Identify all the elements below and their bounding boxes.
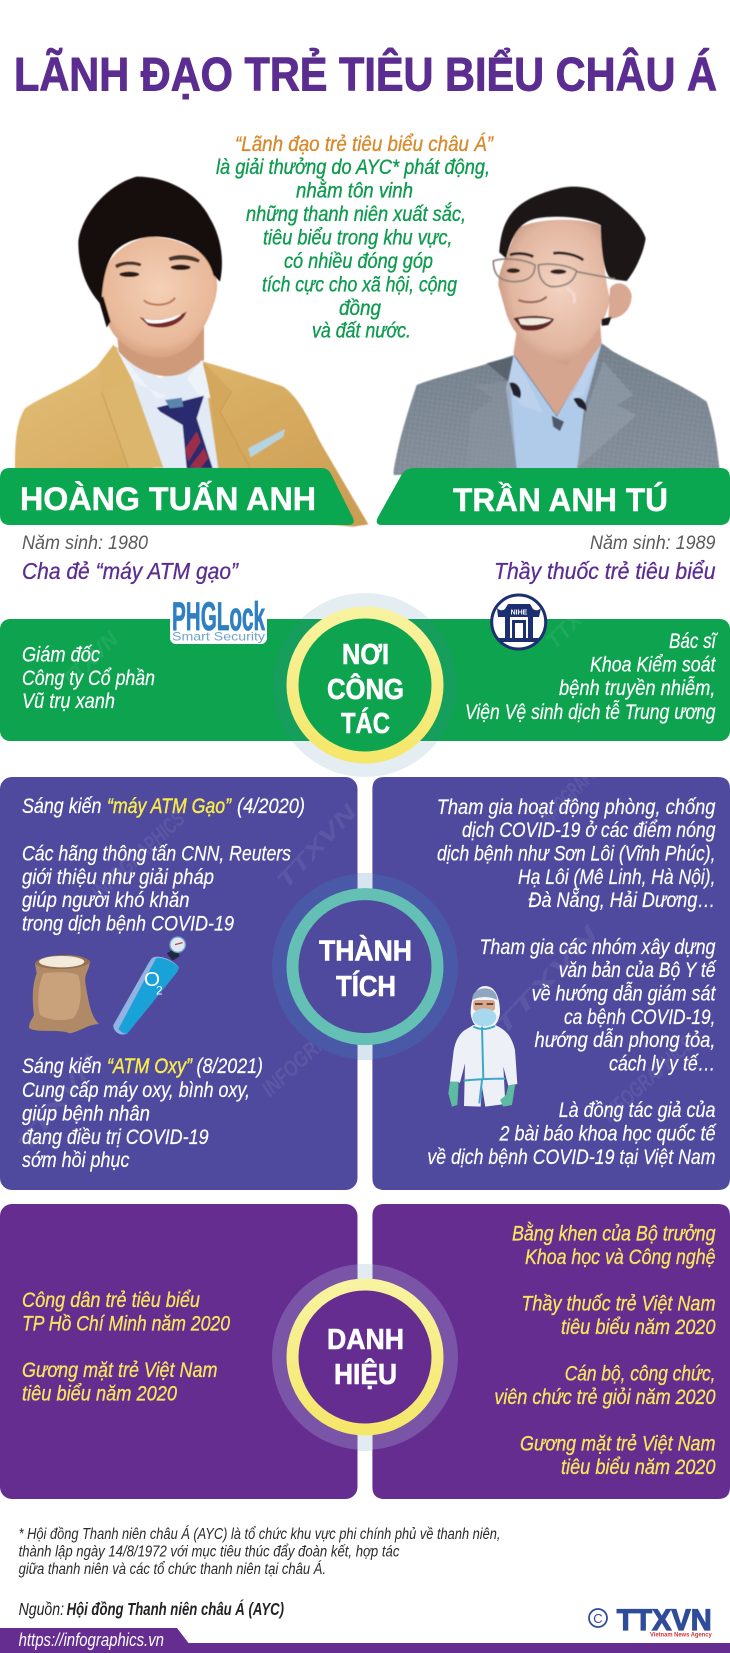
initiative: rice ATM — [22, 795, 305, 936]
left titles text: Công dân trẻ tiêu biểu — [22, 1289, 200, 1312]
initiative: oxygen ATM: đang điều trị COVID-19 — [22, 1126, 209, 1149]
panel: nơi công tác — [0, 586, 730, 741]
source — [19, 1598, 284, 1619]
logo: NIHE: NIHE — [511, 610, 528, 616]
initiative: rice ATM: giúp người khó khăn — [22, 889, 190, 912]
birth year and nickname: left — [22, 532, 239, 584]
badge: danh hiệu — [272, 1264, 458, 1451]
footnote: * Hội đồng Thanh niên châu Á (AYC) là tổ chức khu vực phi chính phủ về thanh niên, — [19, 1526, 500, 1543]
logo: TTXVN: Vietnam News Agency — [650, 1632, 712, 1638]
initiative: oxygen ATM: Sáng kiến — [22, 1055, 102, 1078]
logo: PHGLock — [170, 595, 267, 644]
left titles text: Gương mặt trẻ Việt Nam — [22, 1359, 217, 1382]
intro text: và đất nước. — [312, 320, 411, 342]
logo: TTXVN: TTXVN — [617, 1604, 712, 1637]
birth year and nickname: right: Năm sinh: 1989 — [590, 532, 716, 554]
panel: thành tích left: INFOGRAPHICS — [86, 806, 190, 905]
badge: nơi công tác: CÔNG — [327, 672, 404, 706]
panel: nơi công tác: TTXVN — [541, 586, 609, 654]
logo: NIHE — [492, 595, 546, 649]
badge: thành tích: TÍCH — [336, 969, 396, 1003]
panel: thành tích right: TTXVN — [488, 919, 604, 1040]
initiative: rice ATM: Sáng kiến — [22, 795, 102, 818]
right workplace text — [465, 630, 718, 724]
badge: nơi công tác: TÁC — [341, 706, 390, 740]
source: Hội đồng Thanh niên châu Á (AYC) — [67, 1598, 284, 1619]
left workplace text: Vũ trụ xanh — [22, 690, 115, 713]
badge: nơi công tác: NƠI — [342, 639, 389, 671]
name banner: Hoàng Tuấn Anh — [0, 468, 354, 525]
panel: thành tích left — [0, 777, 372, 1190]
intro text: có nhiều đóng góp — [284, 250, 433, 273]
badge: thành tích: THÀNH — [319, 934, 412, 968]
name banner: Trần Anh Tú — [377, 468, 730, 525]
intro text — [216, 133, 494, 342]
right titles text — [494, 1223, 716, 1479]
panel: thành tích left: TTXVN — [12, 1049, 104, 1156]
achievement: scientific papers — [427, 1099, 717, 1169]
initiative: oxygen ATM: giúp bệnh nhân — [22, 1103, 150, 1126]
portrait: Trần Anh Tú — [393, 187, 719, 475]
logo: TTXVN: C — [593, 1611, 603, 1626]
footnote: giữa thanh niên và các tổ chức thanh niên tại châu Á. — [19, 1561, 326, 1578]
panel: thành tích right — [372, 744, 730, 1190]
initiative: rice ATM: “máy ATM Gạo” — [107, 795, 232, 818]
badge: thành tích — [272, 873, 458, 1060]
panel: danh hiệu left — [0, 1204, 358, 1499]
icon: oxygen tank: 2 — [156, 984, 163, 998]
left workplace text: Giám đốc — [22, 644, 100, 667]
logo: PHGLock: Smart Security — [172, 630, 265, 644]
badge: danh hiệu: DANH — [327, 1324, 404, 1356]
left titles text — [22, 1289, 230, 1406]
badge: danh hiệu: HIỆU — [334, 1357, 397, 1391]
left titles text: tiêu biểu năm 2020 — [22, 1383, 177, 1406]
footer bar with url — [0, 1628, 730, 1653]
initiative: oxygen ATM: “ATM Oxy” — [107, 1055, 193, 1078]
name banner: Hoàng Tuấn Anh: HOÀNG TUẤN ANH — [20, 481, 316, 517]
left workplace text — [22, 644, 155, 713]
footnote — [19, 1526, 500, 1578]
initiative: oxygen ATM — [22, 1055, 263, 1172]
intro text: tích cực cho xã hội, cộng — [262, 273, 457, 296]
panel: danh hiệu right — [372, 1204, 730, 1499]
icon: medical worker in protective suit — [448, 986, 517, 1107]
achievement: ministry documents — [480, 936, 717, 1076]
name banner: Trần Anh Tú: TRẦN ANH TÚ — [453, 482, 668, 518]
birth year and nickname: right — [494, 532, 716, 584]
panel: thành tích left: TTXVN — [271, 798, 362, 893]
logo: PHGLock: PHGLock — [172, 595, 265, 639]
left titles text: TP Hồ Chí Minh năm 2020 — [22, 1313, 230, 1336]
left workplace text: Công ty Cổ phần — [22, 667, 155, 690]
right workplace text: Bác sĩ — [669, 630, 718, 653]
panel: thành tích right: INFOGRAPHICS — [534, 744, 618, 830]
footnote: thành lập ngày 14/8/1972 với mục tiêu thúc đẩy đoàn kết, hợp tác — [19, 1544, 400, 1561]
birth year and nickname: left: Cha đẻ “máy ATM gạo” — [22, 558, 239, 584]
intro text: tiêu biểu trong khu vực, — [263, 227, 452, 250]
initiative: rice ATM: (4/2020) — [237, 795, 305, 818]
initiative: oxygen ATM: sớm hồi phục — [22, 1149, 130, 1172]
source: Nguồn: — [19, 1599, 64, 1619]
initiative: rice ATM: Các hãng thông tấn CNN, Reuters — [22, 843, 291, 866]
birth year and nickname: right: Thầy thuốc trẻ tiêu biểu — [494, 558, 716, 584]
icon: oxygen tank — [113, 937, 185, 1035]
intro text: là giải thưởng do AYC* phát động, — [216, 156, 490, 179]
initiative: rice ATM: giới thiệu như giải pháp — [22, 866, 214, 889]
initiative: rice ATM: trong dịch bệnh COVID-19 — [22, 913, 234, 936]
initiative: oxygen ATM: Cung cấp máy oxy, bình oxy, — [22, 1079, 250, 1102]
portrait: Hoàng Tuấn Anh — [15, 177, 368, 527]
intro text: “Lãnh đạo trẻ tiêu biểu châu Á” — [235, 133, 494, 156]
badge: nơi công tác — [273, 593, 457, 777]
achievement: COVID response — [437, 796, 716, 912]
initiative: oxygen ATM: (8/2021) — [196, 1055, 263, 1078]
icon: oxygen tank: O — [144, 968, 160, 991]
footer bar with url: https://infographics.vn — [19, 1630, 164, 1650]
panel: nơi công tác: TTXVN — [56, 626, 124, 694]
intro text: nhằm tôn vinh — [296, 180, 413, 202]
icon: rice sack — [29, 955, 99, 1033]
birth year and nickname: left: Năm sinh: 1980 — [22, 532, 148, 554]
intro text: đồng — [339, 297, 381, 320]
intro text: những thanh niên xuất sắc, — [246, 203, 466, 226]
panel: thành tích left: INFOGRAPHICS — [256, 991, 372, 1102]
